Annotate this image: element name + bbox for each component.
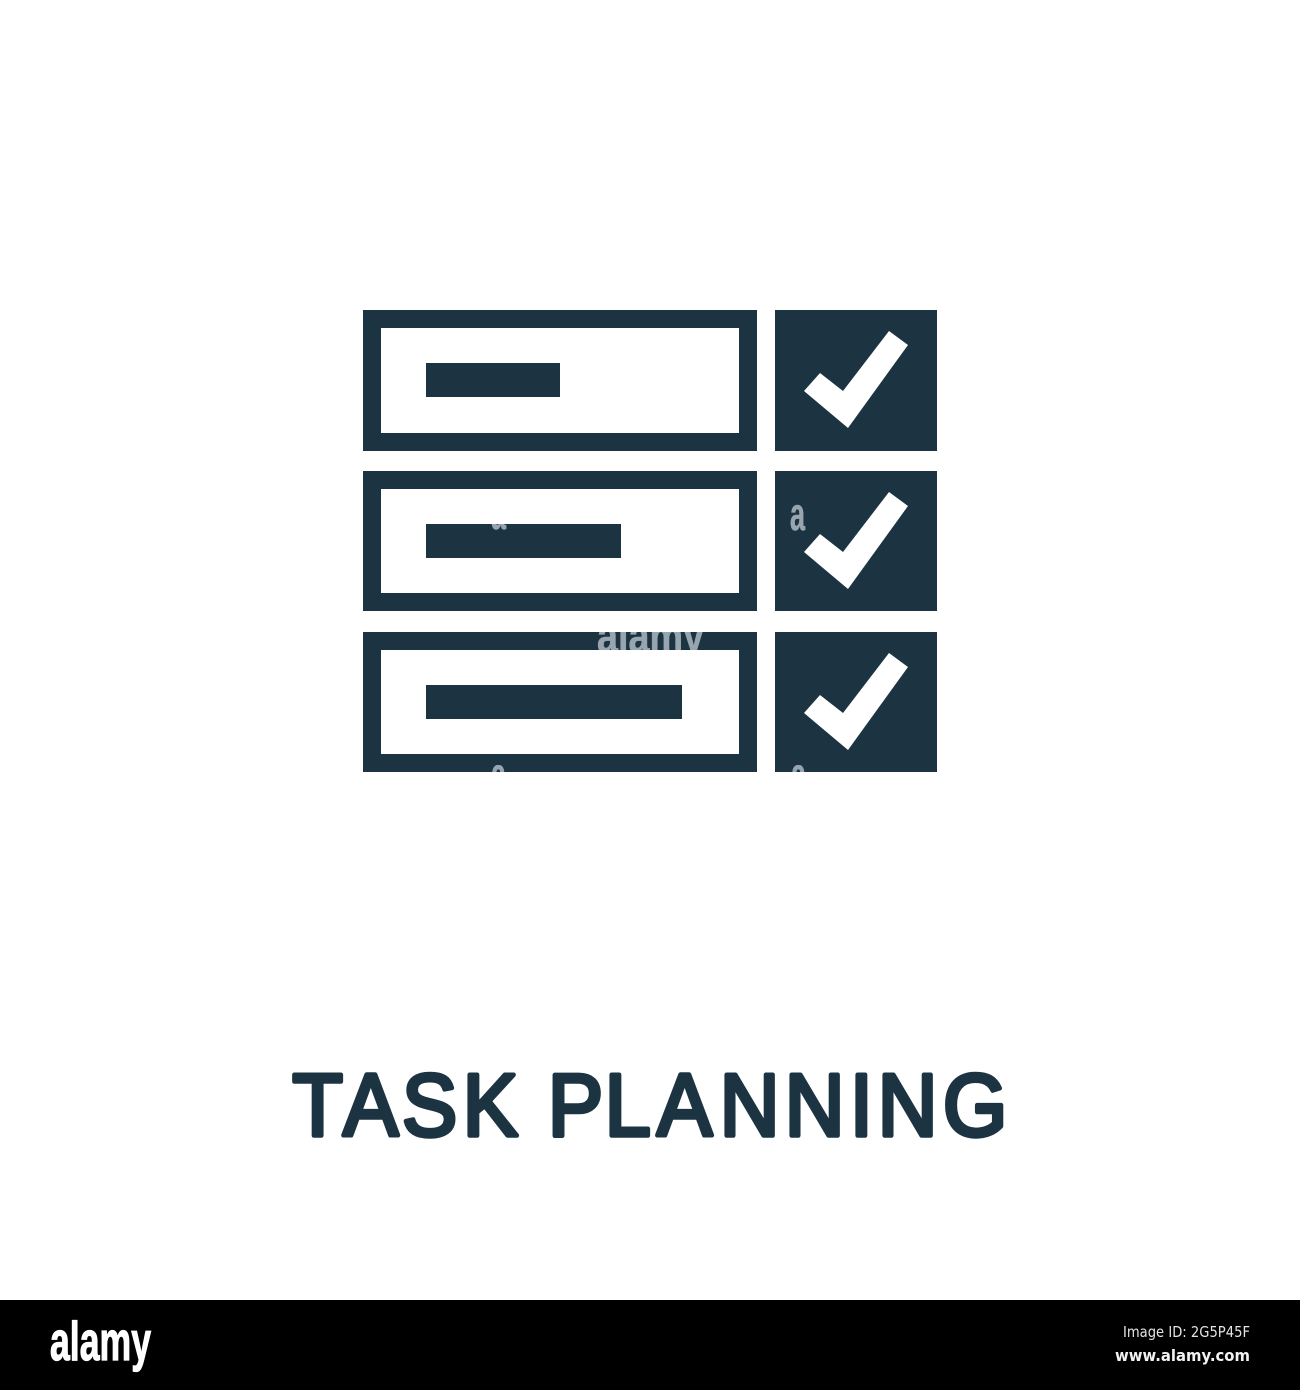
- website: www.alamy.com: [1115, 1346, 1250, 1365]
- watermark fragments: a: [791, 748, 806, 800]
- watermark fragments: alamy: [597, 610, 704, 662]
- row 1: task box: [363, 310, 757, 451]
- title: TASK PLANNING: [292, 1057, 1007, 1155]
- row 3: task box: [363, 632, 757, 772]
- row 3: check square: [775, 632, 937, 772]
- footer bar: [0, 1300, 1300, 1390]
- watermark fragments: a: [491, 748, 506, 800]
- row 2: check square: [775, 471, 937, 611]
- infographic canvas: [0, 310, 1300, 1390]
- row 2: task box: [363, 471, 757, 611]
- watermark fragments: a: [790, 488, 805, 540]
- watermark fragments: [492, 504, 806, 772]
- watermark fragments: a: [491, 487, 506, 539]
- footer logo: alamy: [50, 1310, 151, 1372]
- icon: task planning checklist: [363, 310, 937, 772]
- row 1: check square: [775, 310, 937, 451]
- image id: Image ID: 2G5P45F: [1123, 1323, 1250, 1341]
